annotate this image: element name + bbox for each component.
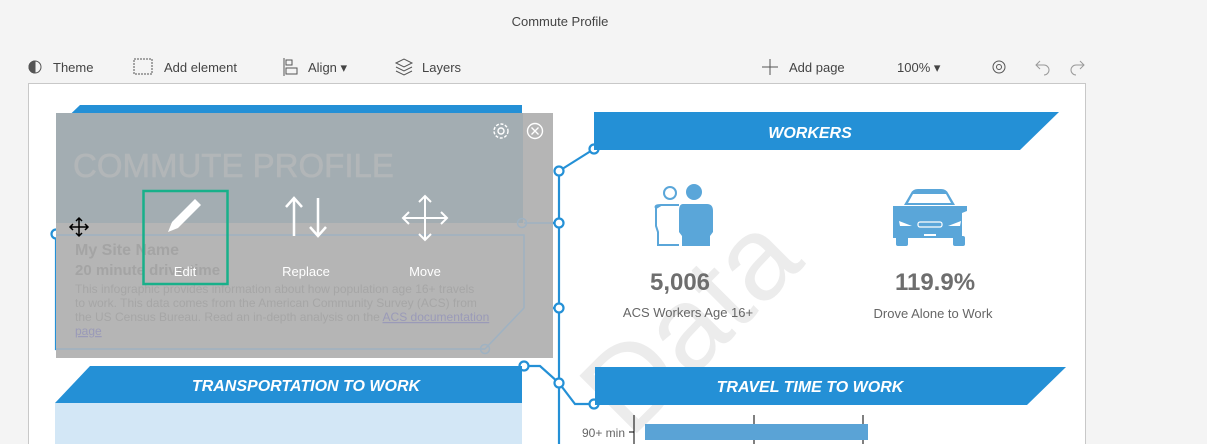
icon: undo redo <box>1036 61 1084 75</box>
button: move <box>403 196 447 279</box>
button: move: Move <box>409 264 441 279</box>
banner: transportation to work: TRANSPORTATION TO WORK <box>192 378 422 395</box>
stat: drove alone: Drove Alone to Work <box>874 306 993 321</box>
toolbar: Align ▾ <box>308 60 348 75</box>
button: edit: Edit <box>174 264 197 279</box>
banner: workers <box>594 112 1059 150</box>
toolbar: 100% ▾ <box>897 60 941 75</box>
toolbar: Layers <box>422 60 462 75</box>
button: replace: Replace <box>282 264 330 279</box>
panel: site description: to work. This data comes from the American Community Survey (ACS) from <box>75 296 477 310</box>
app title: Commute Profile <box>512 14 608 29</box>
icon: car <box>893 189 967 246</box>
icon: people <box>656 184 713 246</box>
header: commute profile banner <box>56 105 522 223</box>
panel: site description: This infographic provides information about how population age 16+ travels <box>75 282 474 296</box>
banner: workers: WORKERS <box>768 125 852 142</box>
panel: site description: My Site Name <box>75 242 179 259</box>
stat: workers: ACS Workers Age 16+ <box>623 305 753 320</box>
icon: layers <box>396 59 412 75</box>
panel: site description: the US Census Bureau. Read an in-depth analysis on the ACS documentation <box>75 310 489 324</box>
icon: gear <box>494 124 508 138</box>
icon: close <box>528 124 542 138</box>
icon: theme <box>29 61 41 73</box>
stat: workers: 5,006 <box>650 269 710 296</box>
toolbar: Add page <box>789 60 845 75</box>
panel: site description <box>75 242 489 338</box>
heading: commute profile: COMMUTE PROFILE <box>73 147 394 184</box>
toolbar: Add element <box>164 60 237 75</box>
button: edit <box>144 191 228 284</box>
icon: add element <box>134 59 152 74</box>
banner: travel time to work <box>595 367 1066 405</box>
toolbar <box>29 58 1084 76</box>
toolbar: Theme <box>53 60 93 75</box>
icon: align <box>284 58 297 76</box>
timeline connector <box>52 144 598 444</box>
page canvas <box>28 84 1086 444</box>
stat: drove alone <box>874 269 993 321</box>
icon: move cursor <box>70 218 88 236</box>
panel: site description: page <box>75 324 102 338</box>
stat: drove alone: 119.9% <box>895 269 975 296</box>
overlay: edit controls <box>56 113 553 358</box>
panel: site description: 20 minute drive time <box>75 262 220 279</box>
bar chart: travel time <box>582 415 868 444</box>
icon: add page <box>762 59 778 75</box>
bar chart: travel time: 90+ min <box>582 426 625 440</box>
icon: settings <box>993 61 1005 73</box>
panel: transportation body <box>55 403 522 444</box>
stat: workers <box>623 269 753 320</box>
button: replace <box>282 198 330 279</box>
banner: travel time to work: TRAVEL TIME TO WORK <box>717 379 905 396</box>
banner: transportation to work <box>55 366 522 403</box>
